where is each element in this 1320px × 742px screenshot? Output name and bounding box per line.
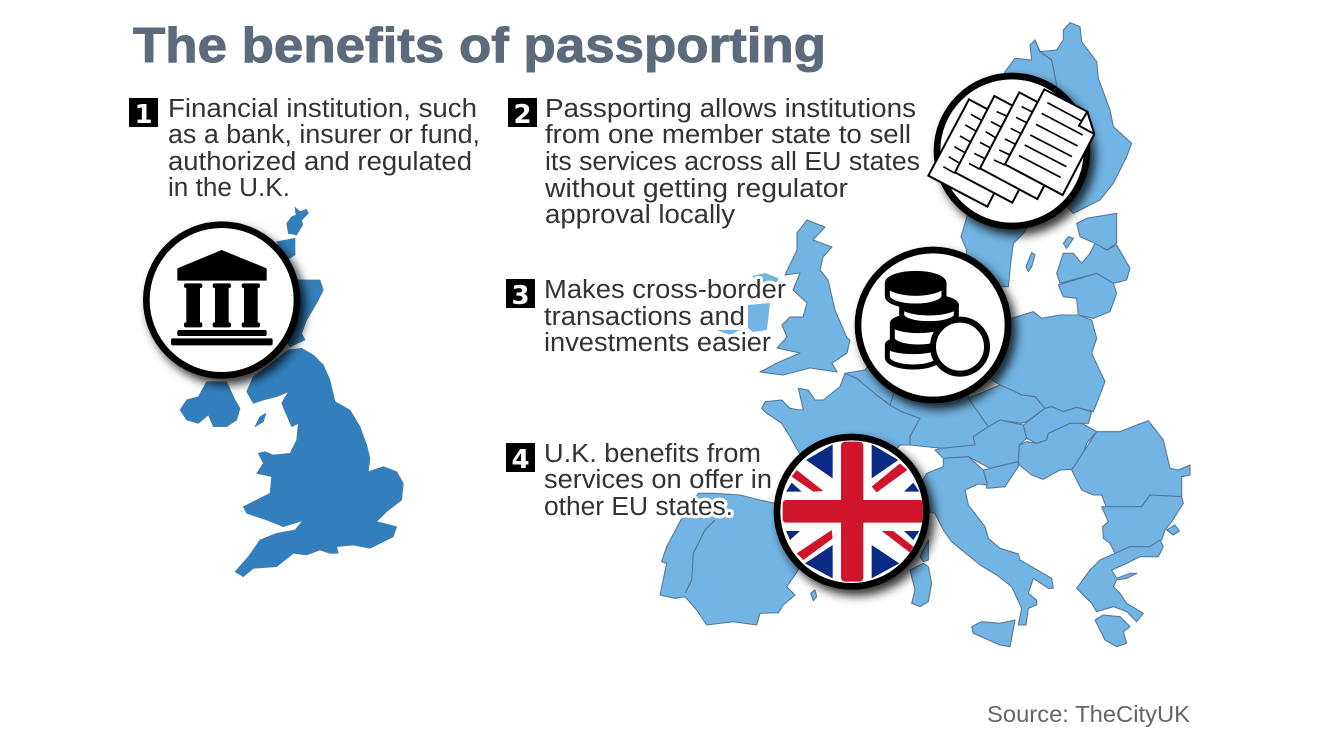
Spain and Portugal [660, 493, 817, 625]
badge 4 [506, 443, 535, 475]
step 2 text: its services across all EU states [545, 148, 920, 176]
Portugal border [685, 520, 715, 593]
Iberia [660, 493, 798, 625]
Sweden [961, 40, 1057, 287]
Peloponnese [1095, 615, 1130, 647]
Ireland [717, 273, 778, 335]
Great Britain mainland [235, 348, 403, 577]
Hungary [1018, 423, 1097, 479]
map: EU states [660, 23, 1190, 647]
step 1 text: as a bank, insurer or fund, [168, 121, 480, 149]
badge 1: 1 [134, 100, 153, 130]
central and southern Europe [762, 312, 1190, 647]
title: The benefits of passporting [133, 19, 826, 73]
map: U.K. [180, 207, 403, 577]
step 1 text: authorized and regulated [168, 148, 472, 176]
Poland [967, 312, 1105, 412]
Sicily [972, 620, 1015, 647]
step 4 text: U.K. benefits from [544, 440, 761, 468]
badge 4: 4 [511, 445, 530, 475]
Bulgaria [1102, 495, 1183, 553]
Czech Republic [968, 385, 1045, 427]
Latvia [1057, 243, 1130, 283]
Black Sea coast fragment [1167, 525, 1179, 535]
Slovakia [1023, 407, 1092, 443]
Finland [1035, 23, 1132, 213]
step 2 text: without getting regulator [544, 175, 849, 203]
step 2 text: Passporting allows institutions [545, 95, 916, 123]
Balearics [811, 590, 817, 601]
step 4 text [506, 440, 772, 521]
Britain (light) [760, 220, 850, 375]
step 2 text [508, 95, 920, 229]
Estonia [1077, 213, 1117, 250]
step 4 text: other EU states. [544, 493, 733, 521]
Shetland and Orkney islands [287, 207, 308, 235]
step 2 text: from one member state to sell [545, 121, 911, 149]
badge 2 [508, 98, 537, 130]
Greece [1077, 540, 1163, 622]
badge 3 [506, 279, 535, 311]
Austria [935, 420, 1027, 468]
northern Scotland [277, 238, 295, 260]
step 3 text: transactions and [544, 303, 745, 331]
step 3 text [506, 276, 787, 357]
step 3 text: investments easier [544, 329, 772, 357]
step 2 text: approval locally [545, 201, 735, 229]
icon: bank [146, 225, 297, 375]
Belgium border [890, 387, 897, 405]
France [762, 373, 920, 512]
Romania [1072, 421, 1190, 508]
Saaremaa [1063, 237, 1073, 248]
Gotland [1026, 253, 1035, 272]
Benelux and Germany [845, 347, 988, 448]
icon: documents [928, 76, 1094, 226]
icon: Union Jack flag [777, 437, 926, 586]
Italy [917, 457, 1053, 625]
Isle of Man [255, 413, 266, 427]
step 1 text: Financial institution, such [168, 95, 477, 123]
badge 2: 2 [513, 100, 532, 130]
Corsica [920, 540, 928, 562]
step 1 text [129, 95, 480, 202]
Scandinavia and Baltics [961, 23, 1132, 318]
badge 1 [129, 98, 158, 130]
badge 3: 3 [511, 281, 530, 311]
Sardinia [910, 563, 932, 607]
Croatia [983, 462, 1018, 488]
Lithuania [1058, 273, 1117, 318]
Scottish east coast [280, 280, 323, 347]
step 1 text: in the U.K. [168, 174, 290, 202]
step 3 text: Makes cross-border [544, 276, 787, 304]
step 4 text: services on offer in [544, 466, 772, 494]
Northern Ireland [180, 382, 240, 427]
icon: coins [858, 250, 1008, 400]
source: Source: TheCityUK [987, 701, 1191, 727]
